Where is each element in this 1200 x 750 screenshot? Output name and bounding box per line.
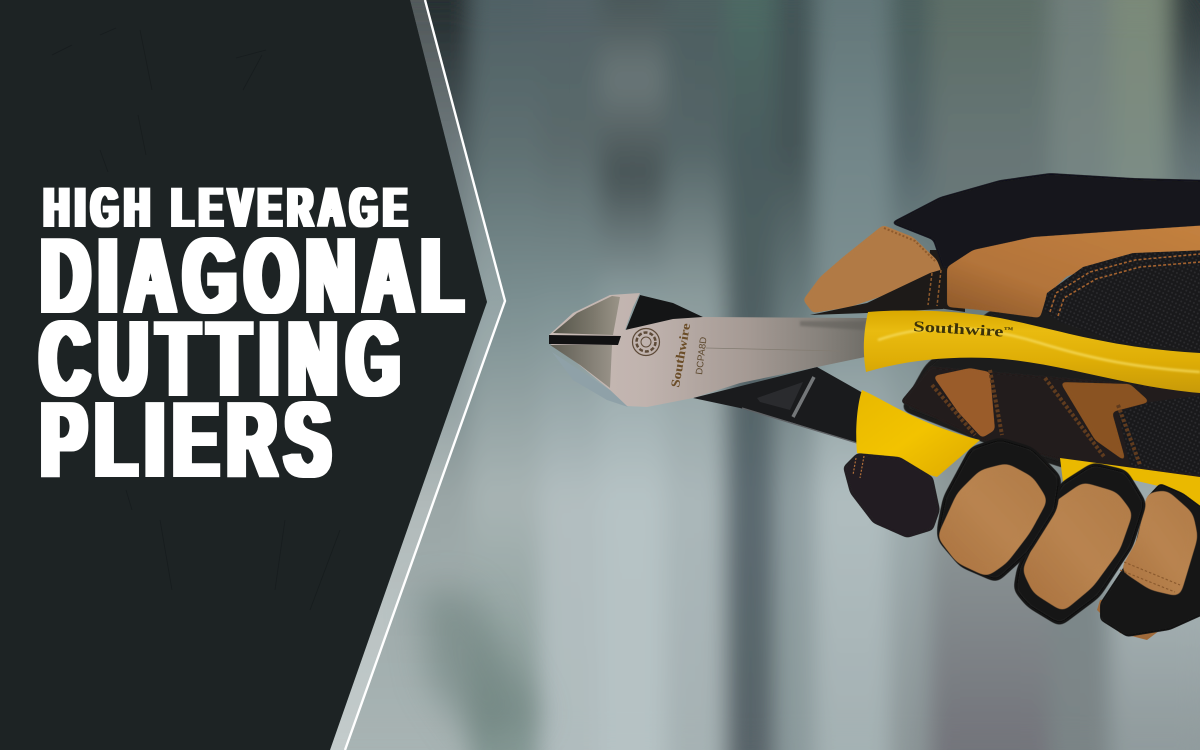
second finger	[1013, 462, 1147, 627]
little finger tip	[843, 453, 940, 538]
pliers front plate	[549, 293, 868, 407]
model engraving: DCPA8D	[694, 336, 710, 375]
handle brand: ™	[1003, 326, 1013, 334]
glove knit back	[890, 173, 1200, 270]
first finger	[937, 437, 1062, 583]
title line: PLIERS: PLIERS	[41, 380, 330, 499]
top cutting bevel	[553, 296, 620, 335]
pivot logo	[632, 328, 660, 356]
title line: DIAGONAL: DIAGONAL	[41, 216, 463, 335]
icon: gloved fingers	[843, 437, 1200, 640]
lower blade edge	[552, 352, 628, 407]
glove thumb underside	[810, 268, 947, 315]
glove tan back panel	[947, 225, 1200, 318]
upper yellow handle	[864, 310, 1200, 393]
glove lower palm	[900, 366, 1200, 480]
palm sliver	[1097, 585, 1200, 640]
glove thumb tip	[803, 225, 942, 313]
title line: HIGH LEVERAGE: HIGH LEVERAGE	[44, 176, 407, 238]
pliers rear arm	[625, 295, 863, 443]
glove palm pad	[1043, 250, 1200, 352]
title: high leverage diagonal cutting pliers	[40, 176, 463, 499]
brand engraving: Southwire	[668, 322, 693, 389]
jaw slot	[549, 335, 621, 345]
lower yellow handle	[856, 390, 1200, 517]
handle brand: Southwire	[913, 319, 979, 339]
third finger	[1100, 483, 1200, 637]
lower cutting bevel	[550, 345, 612, 388]
blurred workshop background photo	[300, 0, 1200, 750]
title line: CUTTING: CUTTING	[40, 299, 400, 418]
chevron white outline	[345, 0, 505, 750]
panel: dark textured chevron	[0, 0, 487, 750]
icon: diagonal cutting pliers	[549, 293, 1200, 517]
icon: gloved hand behind pliers	[803, 173, 1200, 480]
chevron translucent band	[330, 0, 505, 750]
